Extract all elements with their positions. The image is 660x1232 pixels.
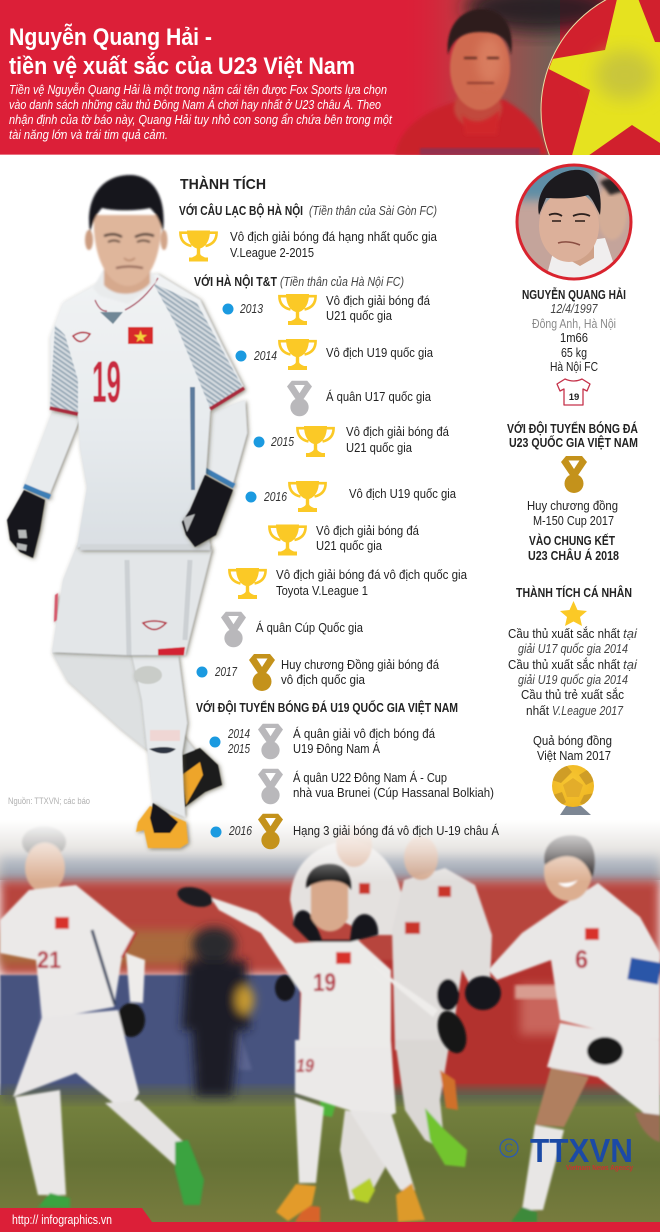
referee silhouette	[182, 927, 254, 1096]
player profile text: NGUYỄN QUANG HẢI	[522, 287, 626, 302]
player arms	[24, 400, 247, 497]
text: individual awards: tại	[623, 658, 638, 672]
item: Toyota V.League 1: Toyota V.League 1	[276, 584, 368, 598]
item: 2015 U21	[254, 425, 449, 457]
jersey flag	[128, 327, 153, 344]
portrait circle	[515, 160, 631, 282]
text: U23 achievements: VÀO CHUNG KẾT	[529, 533, 615, 548]
item: 2014 U19	[236, 339, 433, 370]
player 19 centre: 19	[296, 1056, 314, 1076]
watermark: TTXVN logo	[500, 1132, 633, 1172]
title: Nguyễn Quang Hải -	[9, 23, 212, 51]
text: U23 achievements: M-150 Cup 2017	[533, 514, 614, 528]
player profile text: Hà Nội FC	[550, 360, 598, 374]
text: individual awards: Cầu thủ xuất sắc nhất	[508, 657, 620, 672]
item: U17 runner up	[287, 381, 431, 416]
item: 2017 bronze	[196, 654, 439, 691]
item: V.League 2 2015	[180, 230, 437, 262]
sub heading: U19 national team: VỚI ĐỘI TUYỂN BÓNG ĐÁ U19 QUỐC GIA VIỆT NAM	[196, 700, 458, 715]
main player cutout	[7, 175, 247, 848]
intro paragraph: nhận định của tờ báo này, Quang Hải tuy nhỏ con song ẩn chứa bên trong một	[9, 113, 392, 127]
icon: star	[560, 601, 587, 626]
header panel	[0, 0, 660, 155]
player gloves	[7, 475, 233, 558]
item: 2015 U21: U21 quốc gia	[346, 441, 412, 455]
item: 2013 U21	[222, 294, 430, 325]
header flag circle	[540, 0, 660, 155]
background photo: team celebrating	[0, 820, 660, 1232]
player head	[85, 175, 168, 304]
player front boot	[136, 803, 188, 848]
player profile text: 65 kg	[561, 346, 587, 360]
text: individual awards: Cầu thủ xuất sắc nhất	[508, 626, 620, 641]
icon: jersey 19	[557, 379, 590, 405]
item: U22 Brunei cup: nhà vua Brunei (Cúp Hassanal Bolkiah)	[293, 786, 494, 800]
sub heading: Câu lạc bộ Hà Nội: (Tiền thân của Sài Gòn FC)	[309, 204, 437, 218]
watermark: TTXVN logo: Vietnam News Agency	[566, 1165, 633, 1172]
text: U23 achievements	[527, 499, 619, 563]
text: individual awards: Cầu thủ trẻ xuất sắc	[521, 687, 624, 702]
item: 2013 U21: U21 quốc gia	[326, 309, 392, 323]
item: 2014 2015 U19 Southeast Asia: 2014	[227, 727, 250, 741]
heading: U23 national team: U23 QUỐC GIA VIỆT NAM	[509, 435, 638, 450]
player profile text	[522, 287, 626, 374]
fade from white at top of photo	[0, 820, 660, 882]
text: individual awards: giải U19 quốc gia 2014	[518, 673, 628, 687]
item: 2017 bronze: 2017	[214, 665, 238, 679]
text: individual awards: nhất	[526, 704, 549, 718]
item: 2016 third place	[210, 814, 500, 849]
player 6	[465, 835, 660, 1222]
item: V.League 2 2015: V.League 2-2015	[230, 246, 314, 260]
icon: golden ball	[552, 765, 596, 815]
item: U22 Brunei cup	[258, 769, 494, 804]
item: 2016 third place: Hạng 3 giải bóng đá vô địch U-19 châu Á	[293, 823, 500, 838]
item: 2017 bronze: Huy chương Đồng giải bóng đá	[281, 658, 439, 672]
sub heading: Hà Nội T&T: VỚI HÀ NỘI T&T	[194, 274, 277, 289]
intro paragraph: vào danh sách những cầu thủ Đông Nam Á chơi hay nhất ở U23 châu Á. Theo	[9, 97, 381, 112]
player front leg	[132, 655, 187, 817]
icon: jersey 19: 19	[569, 392, 579, 403]
item: 2016 third place: 2016	[228, 824, 252, 838]
item: U17 runner up: Á quân U17 quốc gia	[326, 389, 431, 404]
header photo: player portrait	[395, 0, 615, 155]
item: 2013 U21: 2013	[239, 302, 263, 316]
intro paragraph: tài năng lớn và trái tim quả cảm.	[9, 128, 168, 142]
item: 2016 U19	[246, 481, 456, 512]
item: Toyota V.League 1	[229, 568, 467, 599]
intro paragraph	[9, 82, 392, 142]
item: national cup runner up: Á quân Cúp Quốc gia	[256, 620, 363, 635]
item: national cup runner up	[221, 612, 363, 647]
item: 2015 U21: Vô địch giải bóng đá	[346, 425, 449, 439]
text: U23 achievements: U23 CHÂU Á 2018	[528, 548, 619, 563]
item: 2014 2015 U19 Southeast Asia: 2015	[227, 742, 250, 756]
player 19 centre: 19	[313, 969, 336, 997]
item: 2015 U21: 2015	[270, 435, 294, 449]
text: individual awards: giải U17 quốc gia 2014	[518, 642, 628, 656]
sub heading: Hà Nội T&T: (Tiền thân của Hà Nội FC)	[280, 275, 404, 289]
text: bronze ball	[533, 734, 612, 763]
sub heading: Câu lạc bộ Hà Nội	[179, 203, 437, 218]
item: 2014 U19: 2014	[253, 349, 277, 363]
text: bronze ball: Việt Nam 2017	[537, 749, 611, 763]
player profile text: 1m66	[560, 331, 588, 345]
source note: Nguồn: TTXVN; các báo	[8, 796, 90, 807]
item: Toyota V.League 1: Vô địch giải bóng đá vô địch quốc gia	[276, 568, 467, 582]
item: 2014 U19: Vô địch U19 quốc gia	[326, 346, 433, 360]
item: 2014 2015 U19 Southeast Asia: Á quân giải vô địch bóng đá	[293, 726, 435, 741]
item: 2016 U19: Vô địch U19 quốc gia	[349, 487, 456, 501]
footer: red bar with url: http:// infographics.vn	[12, 1213, 112, 1227]
text: individual awards	[508, 626, 638, 718]
sub heading: Hà Nội T&T	[194, 274, 404, 289]
sub heading: Câu lạc bộ Hà Nội: VỚI CÂU LẠC BỘ HÀ NỘI	[179, 203, 303, 218]
watermark: TTXVN logo: TTXVN	[530, 1132, 633, 1169]
item: U22 Brunei cup: Á quân U22 Đông Nam Á - Cup	[293, 770, 447, 785]
intro paragraph: Tiền vệ Nguyễn Quang Hải là một trong năm cái tên được Fox Sports lựa chọn	[9, 82, 387, 97]
player 21: 21	[37, 947, 61, 974]
player profile text: 12/4/1997	[550, 302, 598, 316]
player jersey: 19	[92, 350, 121, 415]
icon: bronze medal M-150	[561, 456, 587, 493]
heading: individual achievements: THÀNH TÍCH CÁ NHÂN	[516, 585, 632, 600]
player 19 centre	[175, 864, 472, 1222]
title: tiền vệ xuất sắc của U23 Việt Nam	[9, 52, 355, 80]
watermark: TTXVN logo: C	[504, 1141, 514, 1155]
item: 2014 2015 U19 Southeast Asia	[210, 724, 435, 759]
player shorts	[52, 545, 212, 655]
text: U23 achievements: Huy chương đồng	[527, 499, 618, 513]
player jersey	[50, 274, 244, 547]
item: V.League 2 2015: Vô địch giải bóng đá hạng nhất quốc gia	[230, 230, 437, 244]
stadium background bands	[0, 820, 660, 1232]
title	[9, 23, 355, 80]
item: 2013 U21: Vô địch giải bóng đá	[326, 294, 430, 308]
player 6: 6	[575, 946, 588, 974]
back players	[290, 823, 492, 1222]
player back leg and boot	[52, 650, 222, 807]
player 21	[0, 826, 204, 1208]
item: 2016 U19: 2016	[263, 490, 287, 504]
player profile text: Đông Anh, Hà Nội	[532, 317, 616, 331]
text: individual awards: tại	[623, 627, 638, 641]
text: individual awards: V.League 2017	[552, 704, 624, 718]
text: bronze ball: Quả bóng đồng	[533, 734, 612, 748]
item: U21 national: U21 quốc gia	[316, 539, 382, 553]
item: 2017 bronze: vô địch quốc gia	[281, 673, 365, 687]
item: 2014 2015 U19 Southeast Asia: U19 Đông Nam Á	[293, 741, 381, 756]
heading: U23 national team: VỚI ĐỘI TUYỂN BÓNG ĐÁ	[507, 421, 638, 436]
item: U21 national: Vô địch giải bóng đá	[316, 524, 419, 538]
item: U21 national	[269, 524, 419, 556]
section heading: Thành tích: THÀNH TÍCH	[180, 176, 266, 193]
heading: U23 national team	[507, 421, 638, 450]
jersey logo	[73, 332, 90, 342]
footer: red bar with url	[0, 1208, 660, 1232]
